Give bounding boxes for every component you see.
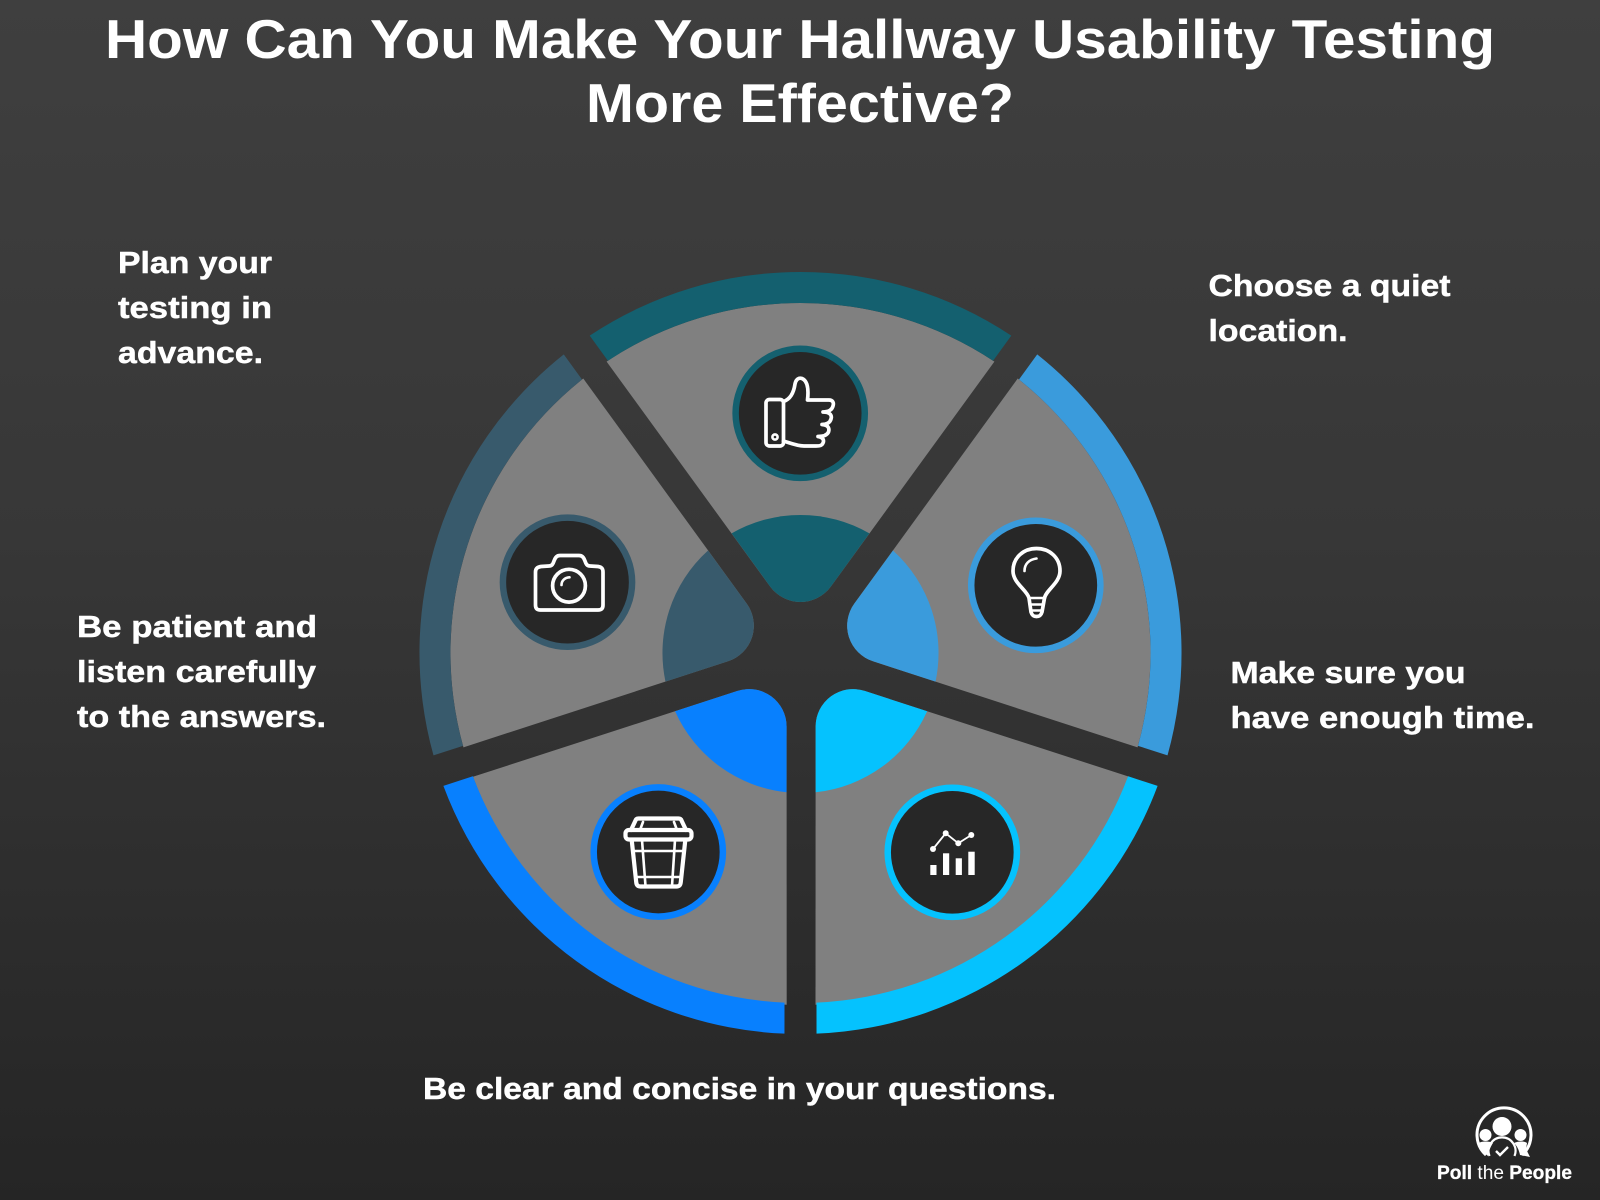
- title: [105, 9, 1495, 134]
- icon: coffee cup: [594, 787, 723, 917]
- label: be patient and listen carefully: listen carefully: [77, 655, 316, 689]
- logo wordmark: Poll the People: [1437, 1162, 1572, 1184]
- label: choose a quiet location: Choose a quiet: [1208, 269, 1450, 303]
- icon: thumbs up: [736, 349, 865, 478]
- label: choose a quiet location: [1208, 269, 1450, 348]
- label: plan your testing in advance: [118, 246, 272, 370]
- label: make sure you have enough time: [1230, 656, 1534, 735]
- label: make sure you have enough time: Make sure you: [1230, 656, 1466, 690]
- label: choose a quiet location: location.: [1208, 314, 1348, 348]
- label: make sure you have enough time: have enough time.: [1230, 701, 1534, 735]
- logo: Poll the People: [1437, 1108, 1572, 1184]
- segmented wheel: [373, 272, 1228, 1085]
- label: plan your testing in advance: advance.: [118, 336, 263, 370]
- label: be clear and concise: Be clear and concise in your questions.: [423, 1072, 1056, 1106]
- icon: camera: [503, 518, 632, 647]
- label: plan your testing in advance: Plan your: [118, 246, 272, 280]
- label: be patient and listen carefully: Be patient and: [77, 610, 317, 644]
- label: plan your testing in advance: testing in: [118, 291, 272, 325]
- label: be patient and listen carefully: to the answers.: [77, 700, 326, 734]
- segment: top: [590, 272, 1011, 602]
- segment: right: [784, 335, 1228, 838]
- segment: left: [373, 335, 817, 838]
- label: be patient and listen carefully: [77, 610, 326, 734]
- segment: lower left: [406, 582, 928, 1085]
- icon: light bulb: [971, 521, 1100, 650]
- logo mark: [1477, 1108, 1531, 1157]
- segment: lower right: [674, 582, 1195, 1085]
- title: How Can You Make Your Hallway Usability Testing: [105, 9, 1495, 70]
- icon: bar and line chart: [888, 788, 1017, 917]
- title: More Effective?: [586, 73, 1014, 134]
